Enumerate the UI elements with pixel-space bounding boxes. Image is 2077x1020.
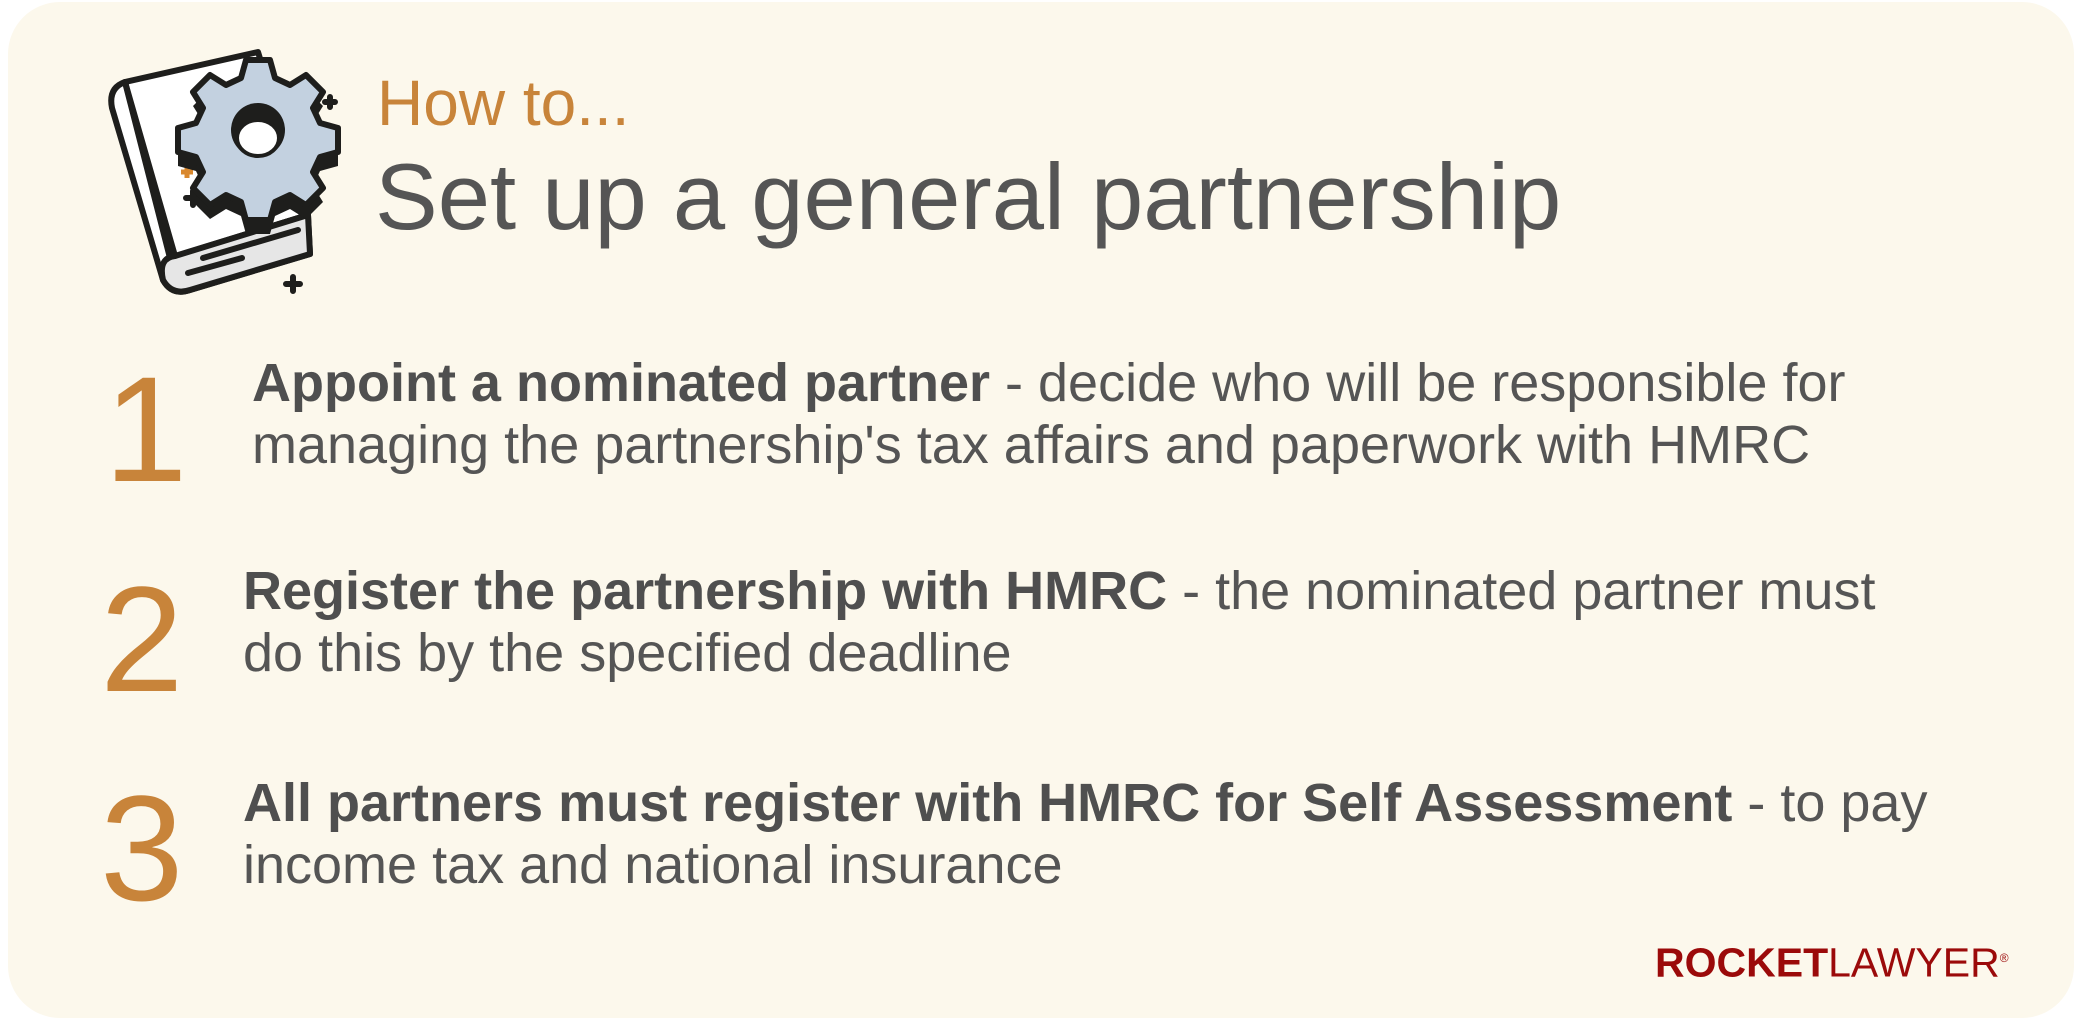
number 1: 1 [104, 345, 187, 513]
step 1 text: managing the partnership's tax affairs and paperwork with HMRC [252, 415, 1810, 475]
heading: How to: How to... [377, 67, 630, 139]
logo: Rocket Lawyer: ROCKETLAWYER® [1655, 940, 2009, 986]
step 3 text: income tax and national insurance [243, 835, 1063, 895]
step 1 text: Appoint a nominated partner - decide who will be responsible for [252, 353, 1845, 413]
icon: book with gear [108, 49, 341, 295]
step 3 text: All partners must register with HMRC for Self Assessment - to pay [243, 773, 1927, 833]
step 2 text [243, 561, 1876, 683]
step 2 text: Register the partnership with HMRC - the nominated partner must [243, 561, 1875, 621]
number 3: 3 [100, 764, 183, 932]
step 1 text [252, 353, 1845, 475]
step 3 text [243, 773, 1928, 895]
number 2: 2 [100, 555, 183, 723]
step 2 text: do this by the specified deadline [243, 623, 1012, 683]
title: Set up a general partnership [375, 144, 1561, 249]
